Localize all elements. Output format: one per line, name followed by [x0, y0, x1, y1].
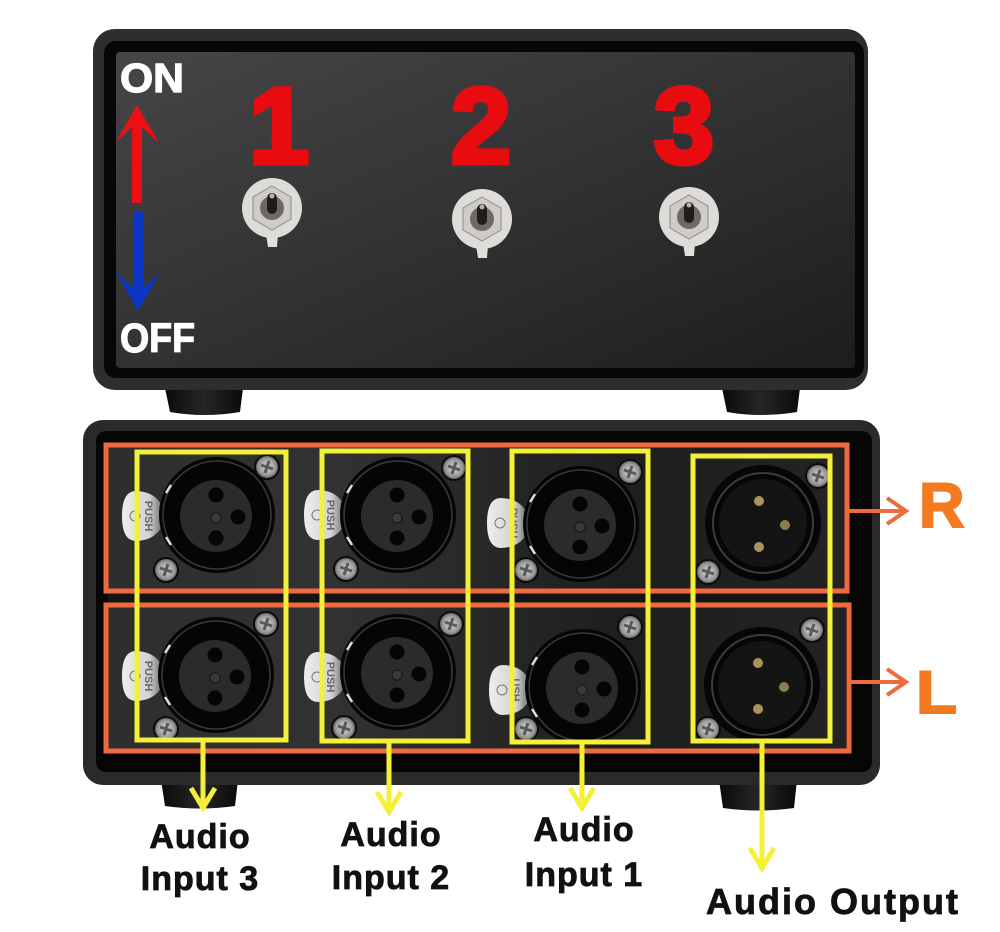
label: Audio Input 2: Audio [340, 816, 442, 854]
label: Audio Input 2: Input 2 [332, 859, 450, 897]
arrow: output [750, 741, 774, 868]
highlight: output column [693, 456, 830, 741]
toggle switch 1 [242, 178, 302, 247]
front face plate [116, 52, 855, 368]
connectors: left channel [122, 612, 824, 745]
number 3: 3 [654, 65, 714, 186]
highlight: input 1 column [512, 451, 648, 742]
label: R: R [919, 471, 964, 541]
rear face plate [108, 447, 846, 749]
label: Audio Input 3: Audio [149, 818, 251, 856]
arrow: red up [115, 105, 159, 203]
arrow: L [850, 669, 906, 695]
arrow: input 2 [377, 741, 401, 812]
connectors: left channel: PUSH [324, 662, 336, 692]
label: ON: ON [120, 55, 184, 101]
foot: front right [722, 388, 800, 415]
enclosure: rear [83, 420, 880, 785]
number 1: 1 [249, 65, 309, 186]
arrow: blue down [116, 212, 160, 311]
toggle switch 2 [452, 189, 512, 258]
highlight: R channel box [106, 445, 847, 591]
connectors: right channel: PUSH [142, 501, 154, 531]
connectors: left channel: USH [509, 678, 521, 702]
number 2: 2 [451, 65, 511, 186]
label: L: L [916, 659, 957, 726]
enclosure: front [93, 29, 868, 390]
foot: front left [165, 388, 243, 415]
arrow: R [848, 498, 906, 524]
label: OFF: OFF [120, 315, 195, 361]
label: Audio Input 1: Audio [533, 811, 635, 849]
foot: rear left [161, 780, 238, 808]
highlight: input 2 column [322, 451, 468, 741]
arrow: input 1 [570, 742, 594, 808]
connectors: left channel: PUSH [142, 661, 154, 691]
label: Audio Input 3: Input 3 [141, 860, 259, 898]
highlight: input 3 column [137, 452, 286, 740]
label: Audio Output: Audio Output [706, 881, 958, 922]
foot: rear right [719, 780, 797, 810]
top unit: front panel [93, 29, 868, 415]
arrow: input 3 [191, 741, 215, 808]
connectors: right channel [122, 455, 830, 584]
connectors: right channel: PUSH [507, 508, 519, 538]
bottom unit: rear panel [83, 420, 880, 810]
connectors: right channel: PUSH [324, 500, 336, 530]
toggle switch 3 [659, 187, 719, 256]
label: Audio Input 1: Input 1 [525, 856, 643, 894]
highlight: L channel box [106, 605, 849, 751]
